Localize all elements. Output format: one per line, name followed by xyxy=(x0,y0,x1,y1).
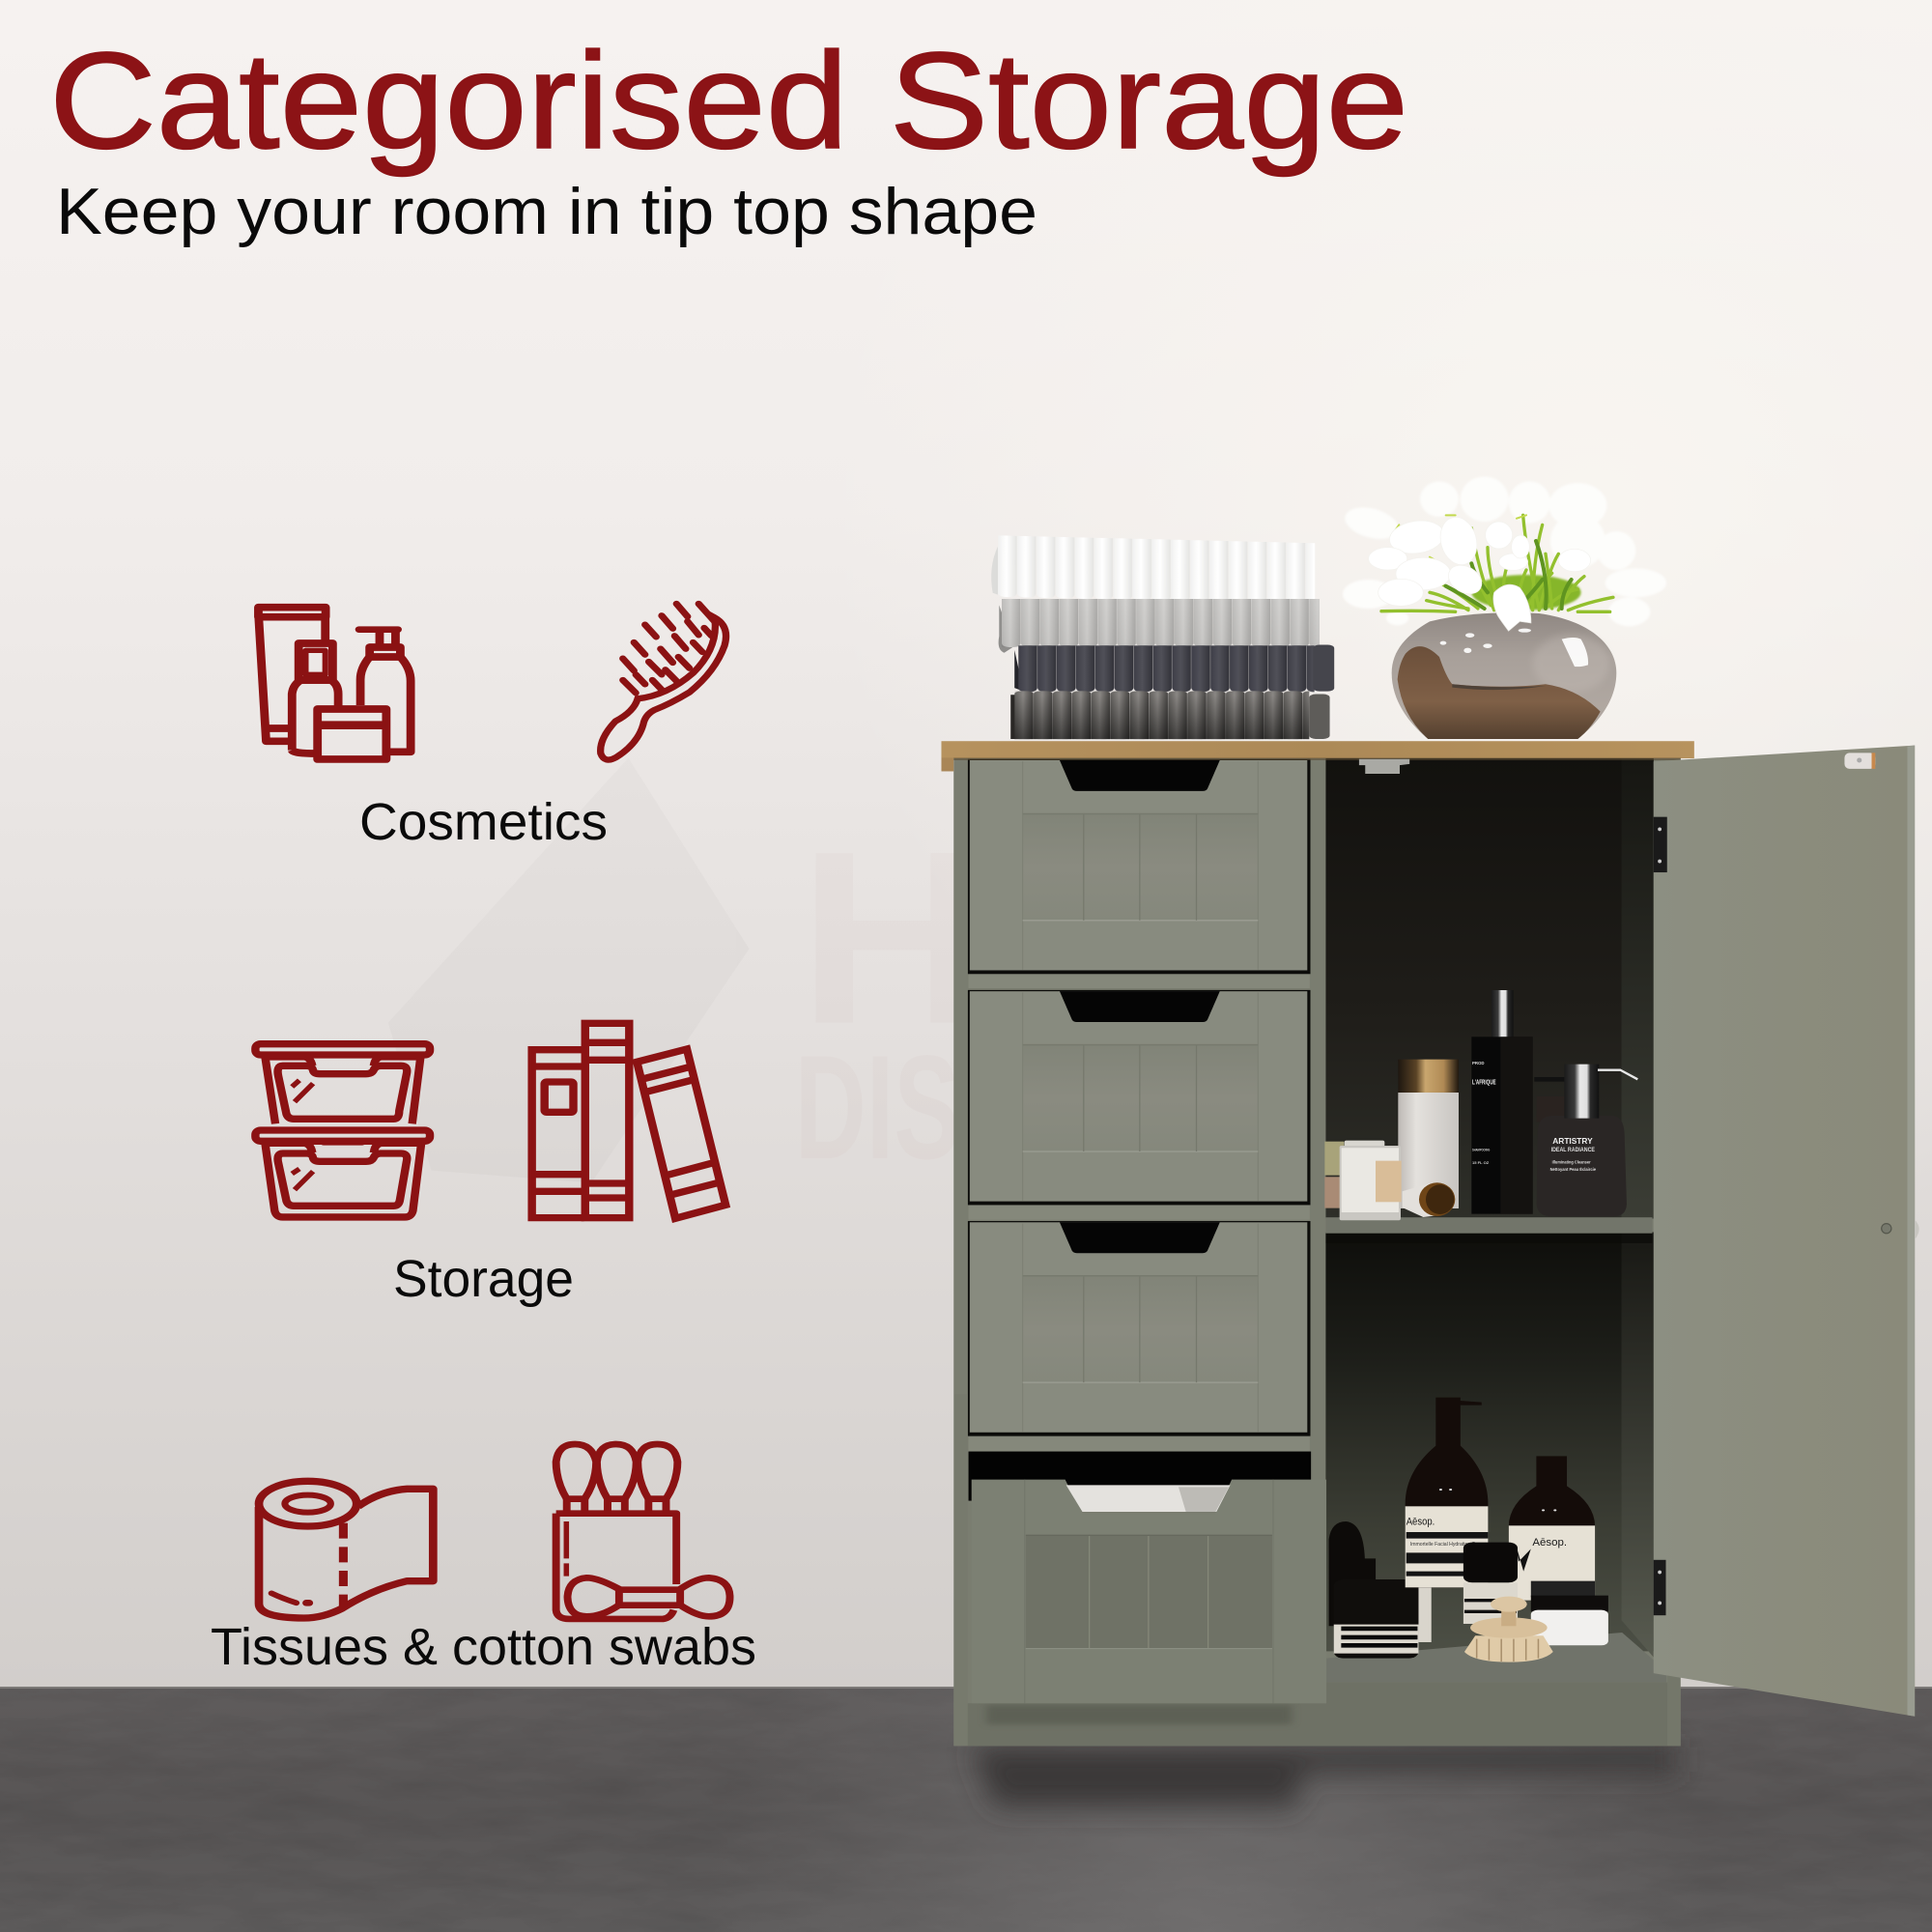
tall black pump bottle xyxy=(1471,990,1533,1214)
drawer rails xyxy=(969,974,1310,1452)
latch xyxy=(1359,759,1409,774)
drawer 1 xyxy=(968,759,1311,974)
open drawer cavity xyxy=(969,1452,1311,1501)
hinge upper xyxy=(1654,817,1667,872)
door knob xyxy=(1882,1220,1919,1239)
towel: dark blue-grey xyxy=(1014,644,1334,692)
cabinet xyxy=(953,757,1681,1746)
open drawer front xyxy=(972,1480,1326,1703)
wooden cabinet top xyxy=(941,741,1694,774)
subtitle: Keep your room in tip top shape xyxy=(56,175,1037,248)
upper shelf toiletries xyxy=(1324,990,1637,1220)
shelf xyxy=(1325,1217,1652,1243)
tall black pump bottle: L'AFRIQUE xyxy=(1472,1078,1496,1087)
drawer 2 xyxy=(968,990,1311,1205)
title: Categorised Storage xyxy=(49,24,1408,178)
candle xyxy=(1340,1141,1402,1220)
lying tube with brown cap xyxy=(1403,1182,1455,1217)
icon: cosmetic bottles xyxy=(258,608,411,759)
background: concrete floor xyxy=(0,1687,1932,1932)
label: Storage: Storage xyxy=(393,1250,574,1308)
Artistry soap dispenser: IDEAL RADIANCE xyxy=(1551,1148,1595,1153)
towel: white xyxy=(991,535,1315,605)
small bottle xyxy=(1463,1543,1518,1624)
dropper bottle xyxy=(1329,1521,1376,1626)
towel stack xyxy=(991,535,1334,739)
tall black pump bottle: 15 FL OZ xyxy=(1472,1160,1490,1165)
icon: hair brush xyxy=(601,604,726,760)
tall black pump bottle: PROD xyxy=(1472,1061,1484,1065)
magnet catch xyxy=(1844,753,1875,769)
icon: books xyxy=(532,1023,725,1218)
label: Tissues & cotton swabs: Tissues & cotton swabs xyxy=(211,1618,756,1676)
Artistry soap dispenser: Nettoyant Peau Éclaircie xyxy=(1550,1167,1597,1172)
plinth xyxy=(954,1394,1680,1746)
front petals xyxy=(1369,513,1591,606)
towel: charcoal xyxy=(1010,691,1330,739)
Artistry soap dispenser: ARTISTRY xyxy=(1552,1136,1593,1146)
large amber bottle with label: Immortelle Facial Hydrating Cream xyxy=(1410,1542,1487,1548)
label: Cosmetics: Cosmetics xyxy=(359,793,608,851)
hinge lower xyxy=(1654,1560,1665,1615)
faint watermark logo xyxy=(388,757,1575,1190)
tall amber bottle with label xyxy=(1509,1456,1608,1645)
Artistry soap dispenser xyxy=(1534,1065,1637,1216)
vase xyxy=(1392,584,1616,739)
jar with striped label xyxy=(1334,1579,1432,1659)
floor shadow under cabinet xyxy=(971,1747,1676,1806)
icon: cotton swabs xyxy=(556,1444,730,1619)
tall black pump bottle: SHAMPOOING xyxy=(1472,1149,1490,1152)
compartment floor xyxy=(1326,1633,1666,1683)
large amber bottle with label: Aēsop. xyxy=(1406,1516,1435,1527)
cabinet carcass xyxy=(953,757,1681,1746)
flower arrangement xyxy=(1342,476,1666,626)
white canister with gold cap xyxy=(1398,1060,1459,1208)
upper compartment xyxy=(1325,757,1654,1218)
back petals xyxy=(1342,476,1666,626)
large amber bottle with label xyxy=(1406,1398,1488,1587)
open cabinet door xyxy=(1654,746,1919,1717)
green foliage mass xyxy=(1471,575,1581,611)
soap bars xyxy=(1324,1142,1344,1208)
lower compartment xyxy=(1325,1233,1654,1658)
towel: light grey xyxy=(999,599,1320,653)
green stems xyxy=(1381,515,1613,611)
Artistry soap dispenser: Illuminating Cleanser xyxy=(1552,1159,1591,1164)
tall amber bottle with label: Aēsop. xyxy=(1532,1537,1567,1548)
icon: tissue roll xyxy=(259,1481,433,1618)
drawer 3 xyxy=(968,1221,1311,1436)
wooden brush xyxy=(1464,1597,1553,1662)
front tulip xyxy=(1493,584,1531,631)
icon: stacked food containers xyxy=(255,1044,430,1217)
cabinet lower section and open drawer xyxy=(954,1394,1680,1746)
